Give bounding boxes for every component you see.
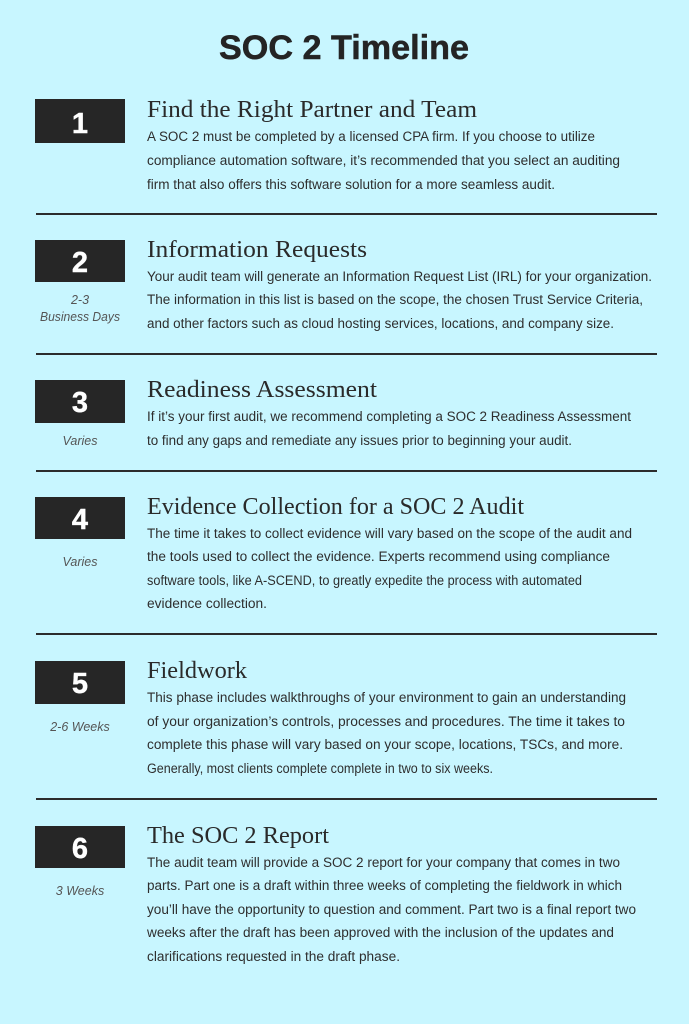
- number badge 3: 3: [72, 387, 88, 419]
- body text: step 2: and other factors such as cloud hosting services, locations, and company size.: [147, 316, 614, 331]
- body text: step 6: weeks after the draft has been approved with the inclusion of the updates and: [146, 925, 614, 940]
- duration: step 3: Varies: [63, 434, 97, 448]
- body text: step 6: clarifications requested in the draft phase.: [147, 949, 400, 964]
- duration: step 4: Varies: [63, 555, 97, 569]
- heading: step 3: Readiness Assessment: [147, 377, 377, 403]
- panel: step 6: [35, 823, 636, 964]
- number badge 2: 2: [72, 247, 88, 279]
- number badge 5: 5: [72, 668, 88, 700]
- body text: step 6: The audit team will provide a SOC 2 report for your company that comes in two: [147, 855, 620, 870]
- body text: step 1: firm that also offers this software solution for a more seamless audit.: [147, 177, 555, 192]
- heading: step 6: The SOC 2 Report: [147, 823, 329, 849]
- body text: step 6: [146, 855, 636, 964]
- panel: step 4: [35, 494, 632, 611]
- heading: step 2: Information Requests: [147, 237, 367, 263]
- panel: step 3: [35, 377, 631, 448]
- body text: step 5: This phase includes walkthroughs of your environment to gain an understanding: [147, 690, 626, 705]
- heading: step 1: Find the Right Partner and Team: [147, 97, 477, 123]
- body text: step 1: compliance automation software, it’s recommended that you select an auditing: [147, 153, 620, 168]
- duration: step 2: 2-3: [70, 293, 89, 307]
- body text: step 5: of your organization’s controls, processes and procedures. The time it takes to: [147, 714, 625, 729]
- number badge 1: 1: [72, 108, 88, 140]
- heading: step 5: Fieldwork: [147, 658, 247, 684]
- body text: step 5: Generally, most clients complete complete in two to six weeks.: [147, 761, 493, 776]
- heading: step 4: Evidence Collection for a SOC 2 Audit: [147, 494, 524, 520]
- body text: step 6: parts. Part one is a draft within three weeks of completing the fieldwork in which: [147, 878, 622, 893]
- duration: step 6: 3 Weeks: [56, 884, 104, 898]
- duration: step 5: 2-6 Weeks: [49, 720, 110, 734]
- body text: step 6: you’ll have the opportunity to question and comment. Part two is a final report two: [147, 902, 636, 917]
- number badge 6: [35, 826, 125, 868]
- number badge 2: [35, 240, 125, 282]
- body text: step 4: evidence collection.: [147, 596, 267, 611]
- number badge 4: 4: [72, 504, 88, 536]
- panel: step 5: [35, 658, 626, 776]
- body text: step 5: [147, 690, 626, 776]
- panel: step 1: [35, 97, 620, 192]
- body text: step 4: [147, 526, 632, 611]
- body text: step 1: [147, 129, 620, 192]
- body text: step 2: Your audit team will generate an Information Request List (IRL) for your organization.: [147, 269, 652, 284]
- body text: step 2: The information in this list is based on the scope, the chosen Trust Service Criteria,: [147, 292, 643, 307]
- body text: step 2: [147, 269, 652, 331]
- number badge 4: [35, 497, 125, 539]
- body text: step 3: to find any gaps and remediate any issues prior to beginning your audit.: [147, 433, 572, 448]
- body text: step 3: [147, 409, 631, 448]
- body text: step 4: the tools used to collect the evidence. Experts recommend using compliance: [147, 549, 610, 564]
- body text: step 3: If it’s your first audit, we recommend completing a SOC 2 Readiness Assessment: [147, 409, 631, 424]
- number badge 3: [35, 380, 125, 423]
- panel: step 2: [35, 237, 652, 331]
- body text: step 4: The time it takes to collect evidence will vary based on the scope of the audit and: [147, 526, 632, 541]
- duration: step 2: Business Days: [40, 310, 120, 324]
- number badge 5: [35, 661, 125, 704]
- title: SOC 2 Timeline: [219, 29, 469, 67]
- number badge 6: 6: [72, 833, 88, 865]
- body text: step 4: software tools, like A-SCEND, to greatly expedite the process with automated: [147, 573, 582, 588]
- body text: step 1: A SOC 2 must be completed by a licensed CPA firm. If you choose to utilize: [147, 129, 595, 144]
- duration: step 2: [40, 293, 120, 324]
- body text: step 5: complete this phase will vary based on your scope, locations, TSCs, and more.: [147, 737, 623, 752]
- number badge 1: [35, 99, 125, 143]
